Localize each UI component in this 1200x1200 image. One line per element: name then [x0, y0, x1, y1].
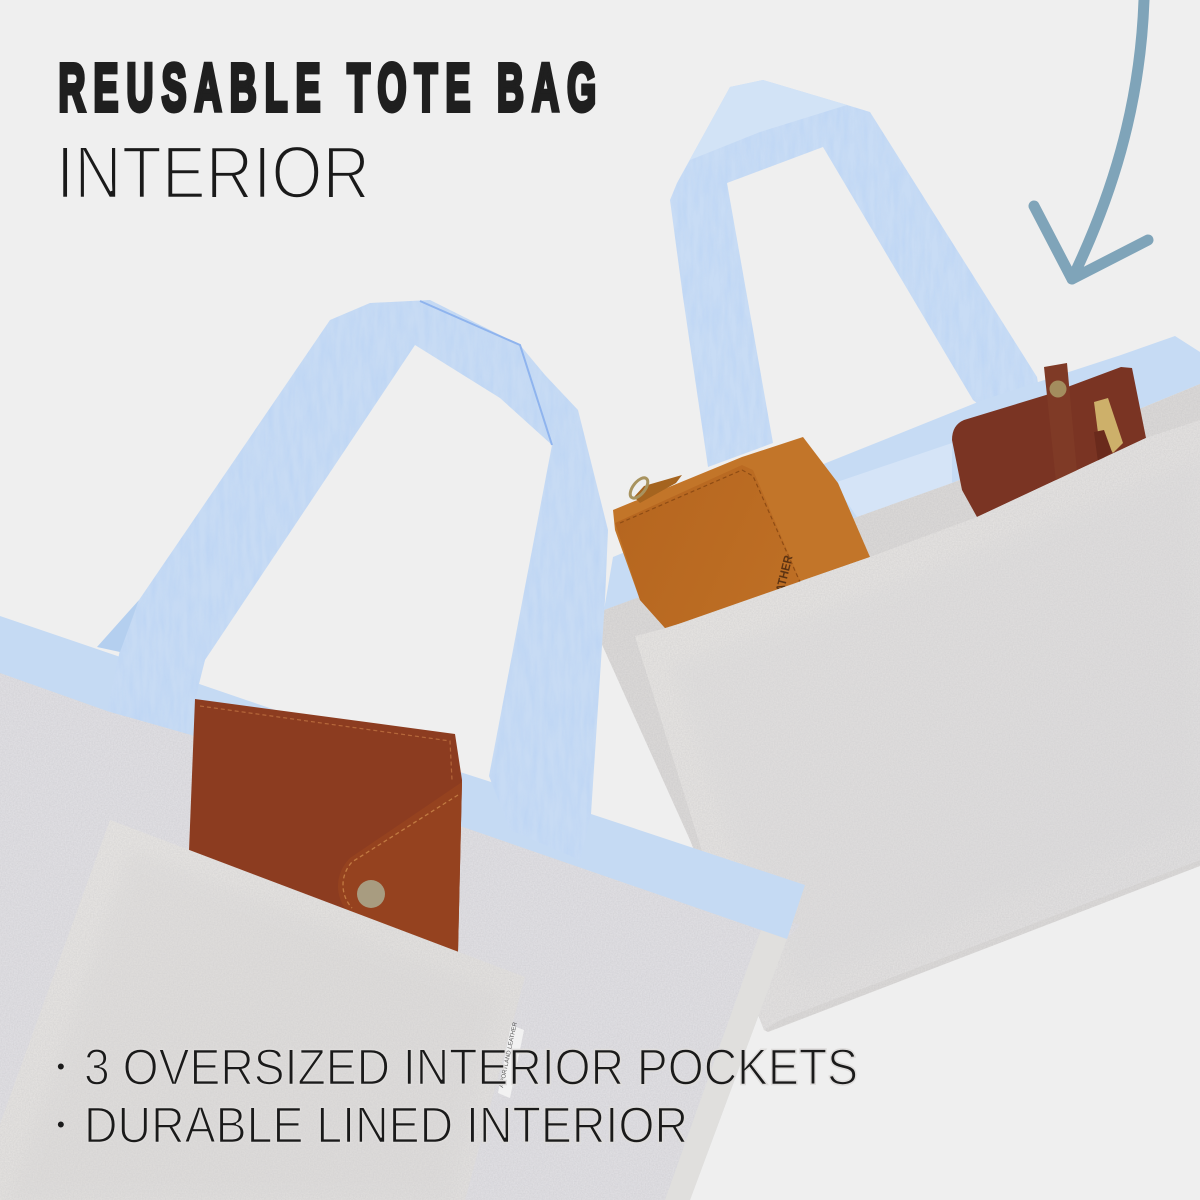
pouch zip pull	[1094, 430, 1112, 462]
wallet clasp	[634, 475, 682, 503]
left bag side hem	[665, 930, 787, 1200]
title	[56, 51, 596, 214]
right bag top fold	[677, 80, 847, 183]
notebook stitching	[200, 706, 452, 780]
title line one: REUSABLE TOTE BAG	[58, 51, 596, 125]
brown zip pouch	[952, 363, 1146, 517]
right bag linen body	[599, 384, 1200, 1032]
title line two: INTERIOR	[56, 131, 370, 214]
left handle fold accent	[420, 301, 552, 445]
left pocket shading	[10, 850, 500, 1200]
feature one text: 3 OVERSIZED INTERIOR POCKETS	[84, 1038, 858, 1096]
label text: A PORTLAND LEATHER	[499, 1021, 519, 1088]
left bag linen body	[0, 660, 800, 1200]
left bag blue lining	[0, 616, 805, 939]
left bag front pocket	[0, 820, 525, 1200]
right bag handle	[670, 80, 1040, 467]
pouch strap	[1044, 363, 1077, 482]
wallet stamp: LEATHER	[769, 554, 796, 608]
pocket label	[498, 1021, 524, 1098]
feature one	[57, 1038, 858, 1096]
notebook flap	[338, 782, 462, 952]
notebook snap	[357, 880, 385, 908]
left handle shadow wing	[97, 600, 139, 652]
right bag lining highlight	[834, 443, 952, 517]
right bag front pocket	[635, 420, 1200, 1030]
flap stitching	[343, 795, 458, 908]
feature two	[57, 1096, 688, 1154]
pouch zipper	[1094, 398, 1123, 453]
right pocket shading	[670, 460, 1200, 985]
pouch snap	[1050, 380, 1066, 398]
wallet ring	[627, 475, 651, 501]
left bag handle	[107, 300, 608, 860]
right tote bag	[599, 80, 1200, 1032]
bullet one: •	[57, 1054, 65, 1079]
feature list	[57, 1038, 858, 1154]
wallet stitching	[620, 470, 800, 582]
wallet front flap	[615, 465, 803, 628]
left tote bag	[0, 300, 805, 1200]
bullet two: •	[57, 1112, 65, 1137]
feature two text: DURABLE LINED INTERIOR	[84, 1096, 688, 1154]
right bag blue lining	[604, 336, 1200, 610]
notebook	[189, 699, 462, 952]
tan leather wallet	[613, 437, 870, 628]
arrow	[1034, 0, 1148, 279]
